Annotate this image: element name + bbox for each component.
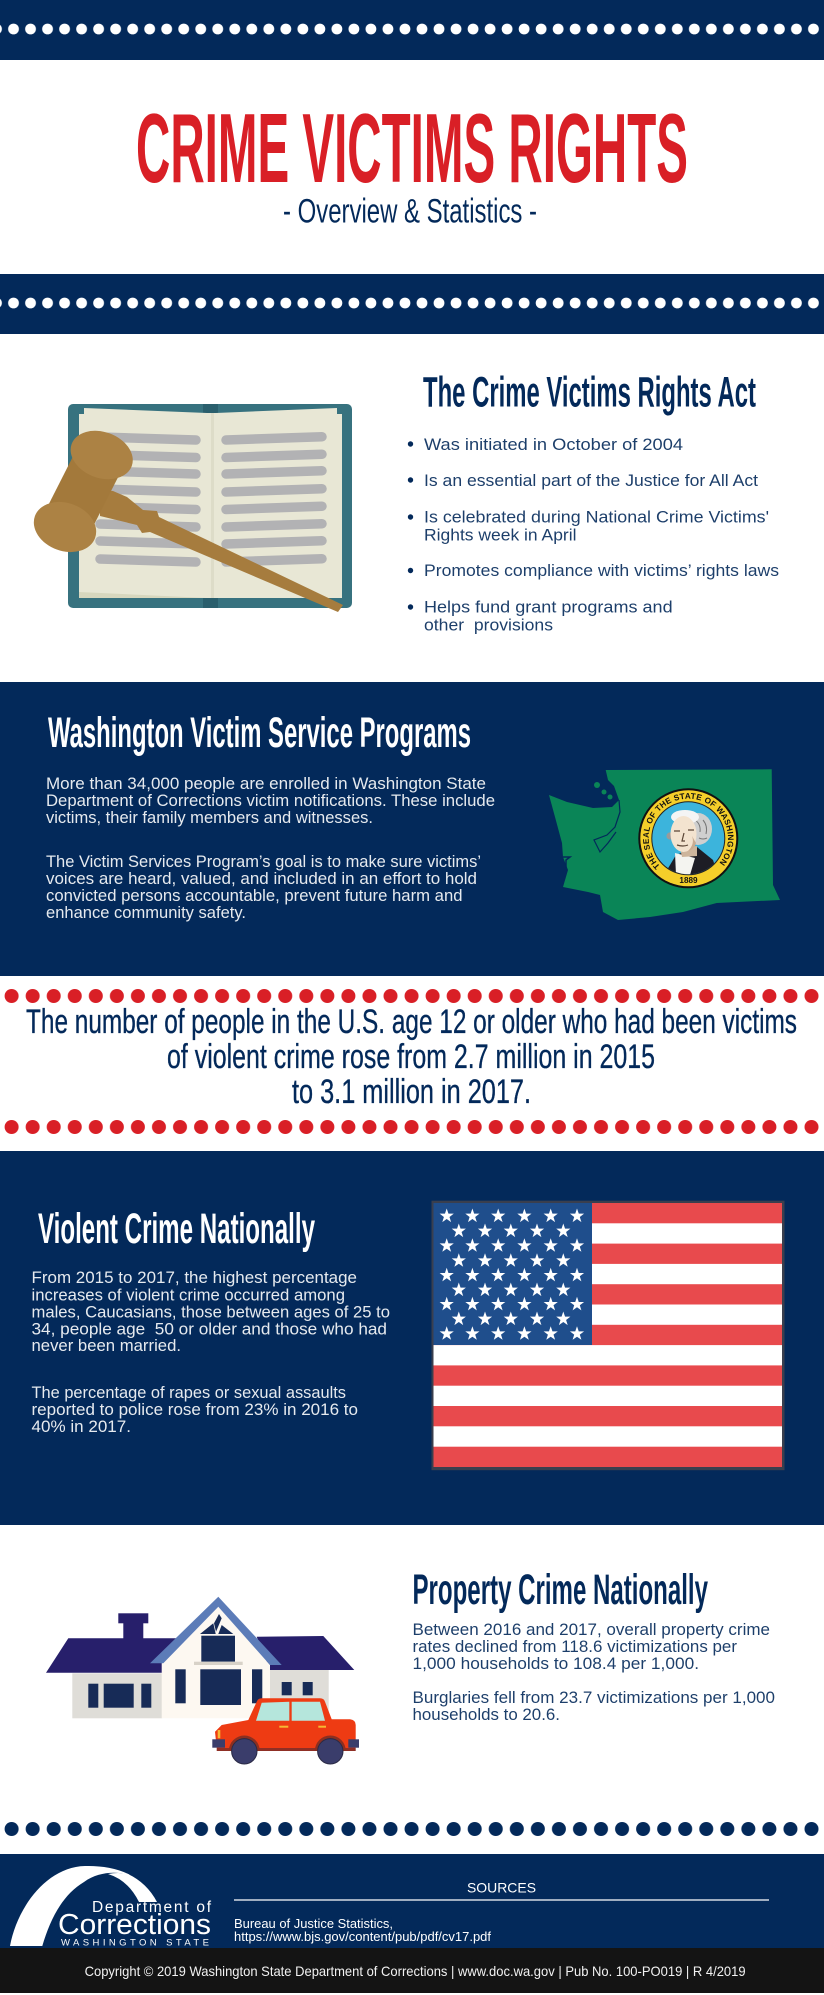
icon: american flag xyxy=(432,1201,784,1470)
panel: violent crime nationally xyxy=(0,1151,824,1525)
paragraph: burglaries xyxy=(412,1688,775,1724)
panel: footer xyxy=(0,1854,824,1949)
paragraph: rapes and sexual assaults xyxy=(32,1383,358,1436)
paragraph: program goal xyxy=(46,852,481,922)
paragraph: enrolment: More than 34,000 people are enrolled in Washington State xyxy=(46,774,486,793)
paragraph: enrolment: victims, their family members and witnesses. xyxy=(46,808,373,827)
subtitle: - Overview & Statistics - xyxy=(283,192,537,230)
paragraph: program goal: convicted persons accountable, prevent future harm and xyxy=(46,886,462,905)
callout: violent crime statistic: to 3.1 million in 2017. xyxy=(292,1073,531,1111)
source citation xyxy=(234,1916,491,1944)
paragraph: highest increases: increases of violent crime occurred among xyxy=(32,1286,345,1304)
paragraph: enrolment xyxy=(46,774,495,827)
heading: Washington Victim Service Programs xyxy=(48,709,471,757)
bullet list: other provisions xyxy=(424,616,553,634)
paragraph: highest increases: never been married. xyxy=(32,1336,181,1355)
copyright bar xyxy=(0,1948,824,1993)
paragraph: program goal: voices are heard, valued, and included in an effort to hold xyxy=(46,869,477,888)
icon: open book xyxy=(68,404,352,608)
source citation: Bureau of Justice Statistics, xyxy=(234,1916,393,1931)
paragraph: highest increases: males, Caucasians, those between ages of 25 to xyxy=(32,1302,390,1322)
bullet list: Helps fund grant programs and xyxy=(424,598,673,616)
logo: department of corrections: Corrections xyxy=(58,1909,211,1941)
top banner xyxy=(0,0,824,60)
panel: property crime nationally xyxy=(46,1566,775,1764)
callout: violent crime statistic xyxy=(0,989,824,1134)
bullet list: Is an essential part of the Justice for All Act xyxy=(424,471,758,490)
paragraph: rapes and sexual assaults: 40% in 2017. xyxy=(32,1417,131,1436)
icon: red car xyxy=(212,1698,359,1764)
seal: 1889 xyxy=(679,876,698,885)
heading: Violent Crime Nationally xyxy=(38,1205,315,1253)
paragraph: highest increases xyxy=(32,1268,390,1355)
paragraph: highest increases: 34, people age 50 or older and those who had xyxy=(32,1320,387,1338)
bullet list xyxy=(408,435,779,634)
icon: washington state map with seal xyxy=(549,769,780,920)
seal: THE SEAL OF THE STATE OF WASHINGTON xyxy=(643,793,734,870)
paragraph: highest increases: From 2015 to 2017, the highest percentage xyxy=(32,1268,357,1287)
copyright bar: Copyright © 2019 Washington State Department of Corrections | www.doc.wa.gov | Pub No. 100-PO019 | R 4/2019 xyxy=(85,1963,746,1979)
panel: washington victim service programs xyxy=(0,682,824,976)
bullet list: Was initiated in October of 2004 xyxy=(424,435,683,454)
bullet list: Promotes compliance with victims’ rights laws xyxy=(424,561,779,580)
paragraph: property crime rates: Between 2016 and 2017, overall property crime xyxy=(412,1620,770,1639)
callout: violent crime statistic: of violent crime rose from 2.7 million in 2015 xyxy=(167,1038,655,1076)
source citation: https://www.bjs.gov/content/pub/pdf/cv17.pdf xyxy=(234,1929,491,1944)
paragraph: rapes and sexual assaults: The percentage of rapes or sexual assaults xyxy=(32,1383,346,1402)
paragraph: property crime rates: 1,000 households to 108.4 per 1,000. xyxy=(412,1654,699,1673)
paragraph: burglaries: Burglaries fell from 23.7 victimizations per 1,000 xyxy=(412,1688,775,1707)
paragraph: burglaries: households to 20.6. xyxy=(412,1705,560,1724)
paragraph: program goal: The Victim Services Program’s goal is to make sure victims’ xyxy=(46,852,481,871)
second banner xyxy=(0,274,824,334)
logo: department of corrections xyxy=(10,1866,212,1949)
paragraph: property crime rates: rates declined from 118.6 victimizations per xyxy=(412,1637,737,1656)
sources heading: SOURCES xyxy=(467,1880,536,1896)
panel: the crime victims rights act xyxy=(27,368,779,634)
bullet list: Is celebrated during National Crime Victims' xyxy=(424,508,769,526)
bullet list: Rights week in April xyxy=(424,526,576,544)
paragraph: rapes and sexual assaults: reported to police rose from 23% in 2016 to xyxy=(32,1400,358,1419)
paragraph: enrolment: Department of Corrections victim notifications. These include xyxy=(46,791,495,810)
logo: department of corrections: WASHINGTON STATE xyxy=(61,1938,209,1949)
icon: gavel xyxy=(27,422,343,612)
icon: house xyxy=(46,1597,354,1718)
paragraph: property crime rates xyxy=(412,1620,770,1673)
paragraph: program goal: enhance community safety. xyxy=(46,903,246,922)
logo: department of corrections: Department of xyxy=(92,1899,212,1916)
